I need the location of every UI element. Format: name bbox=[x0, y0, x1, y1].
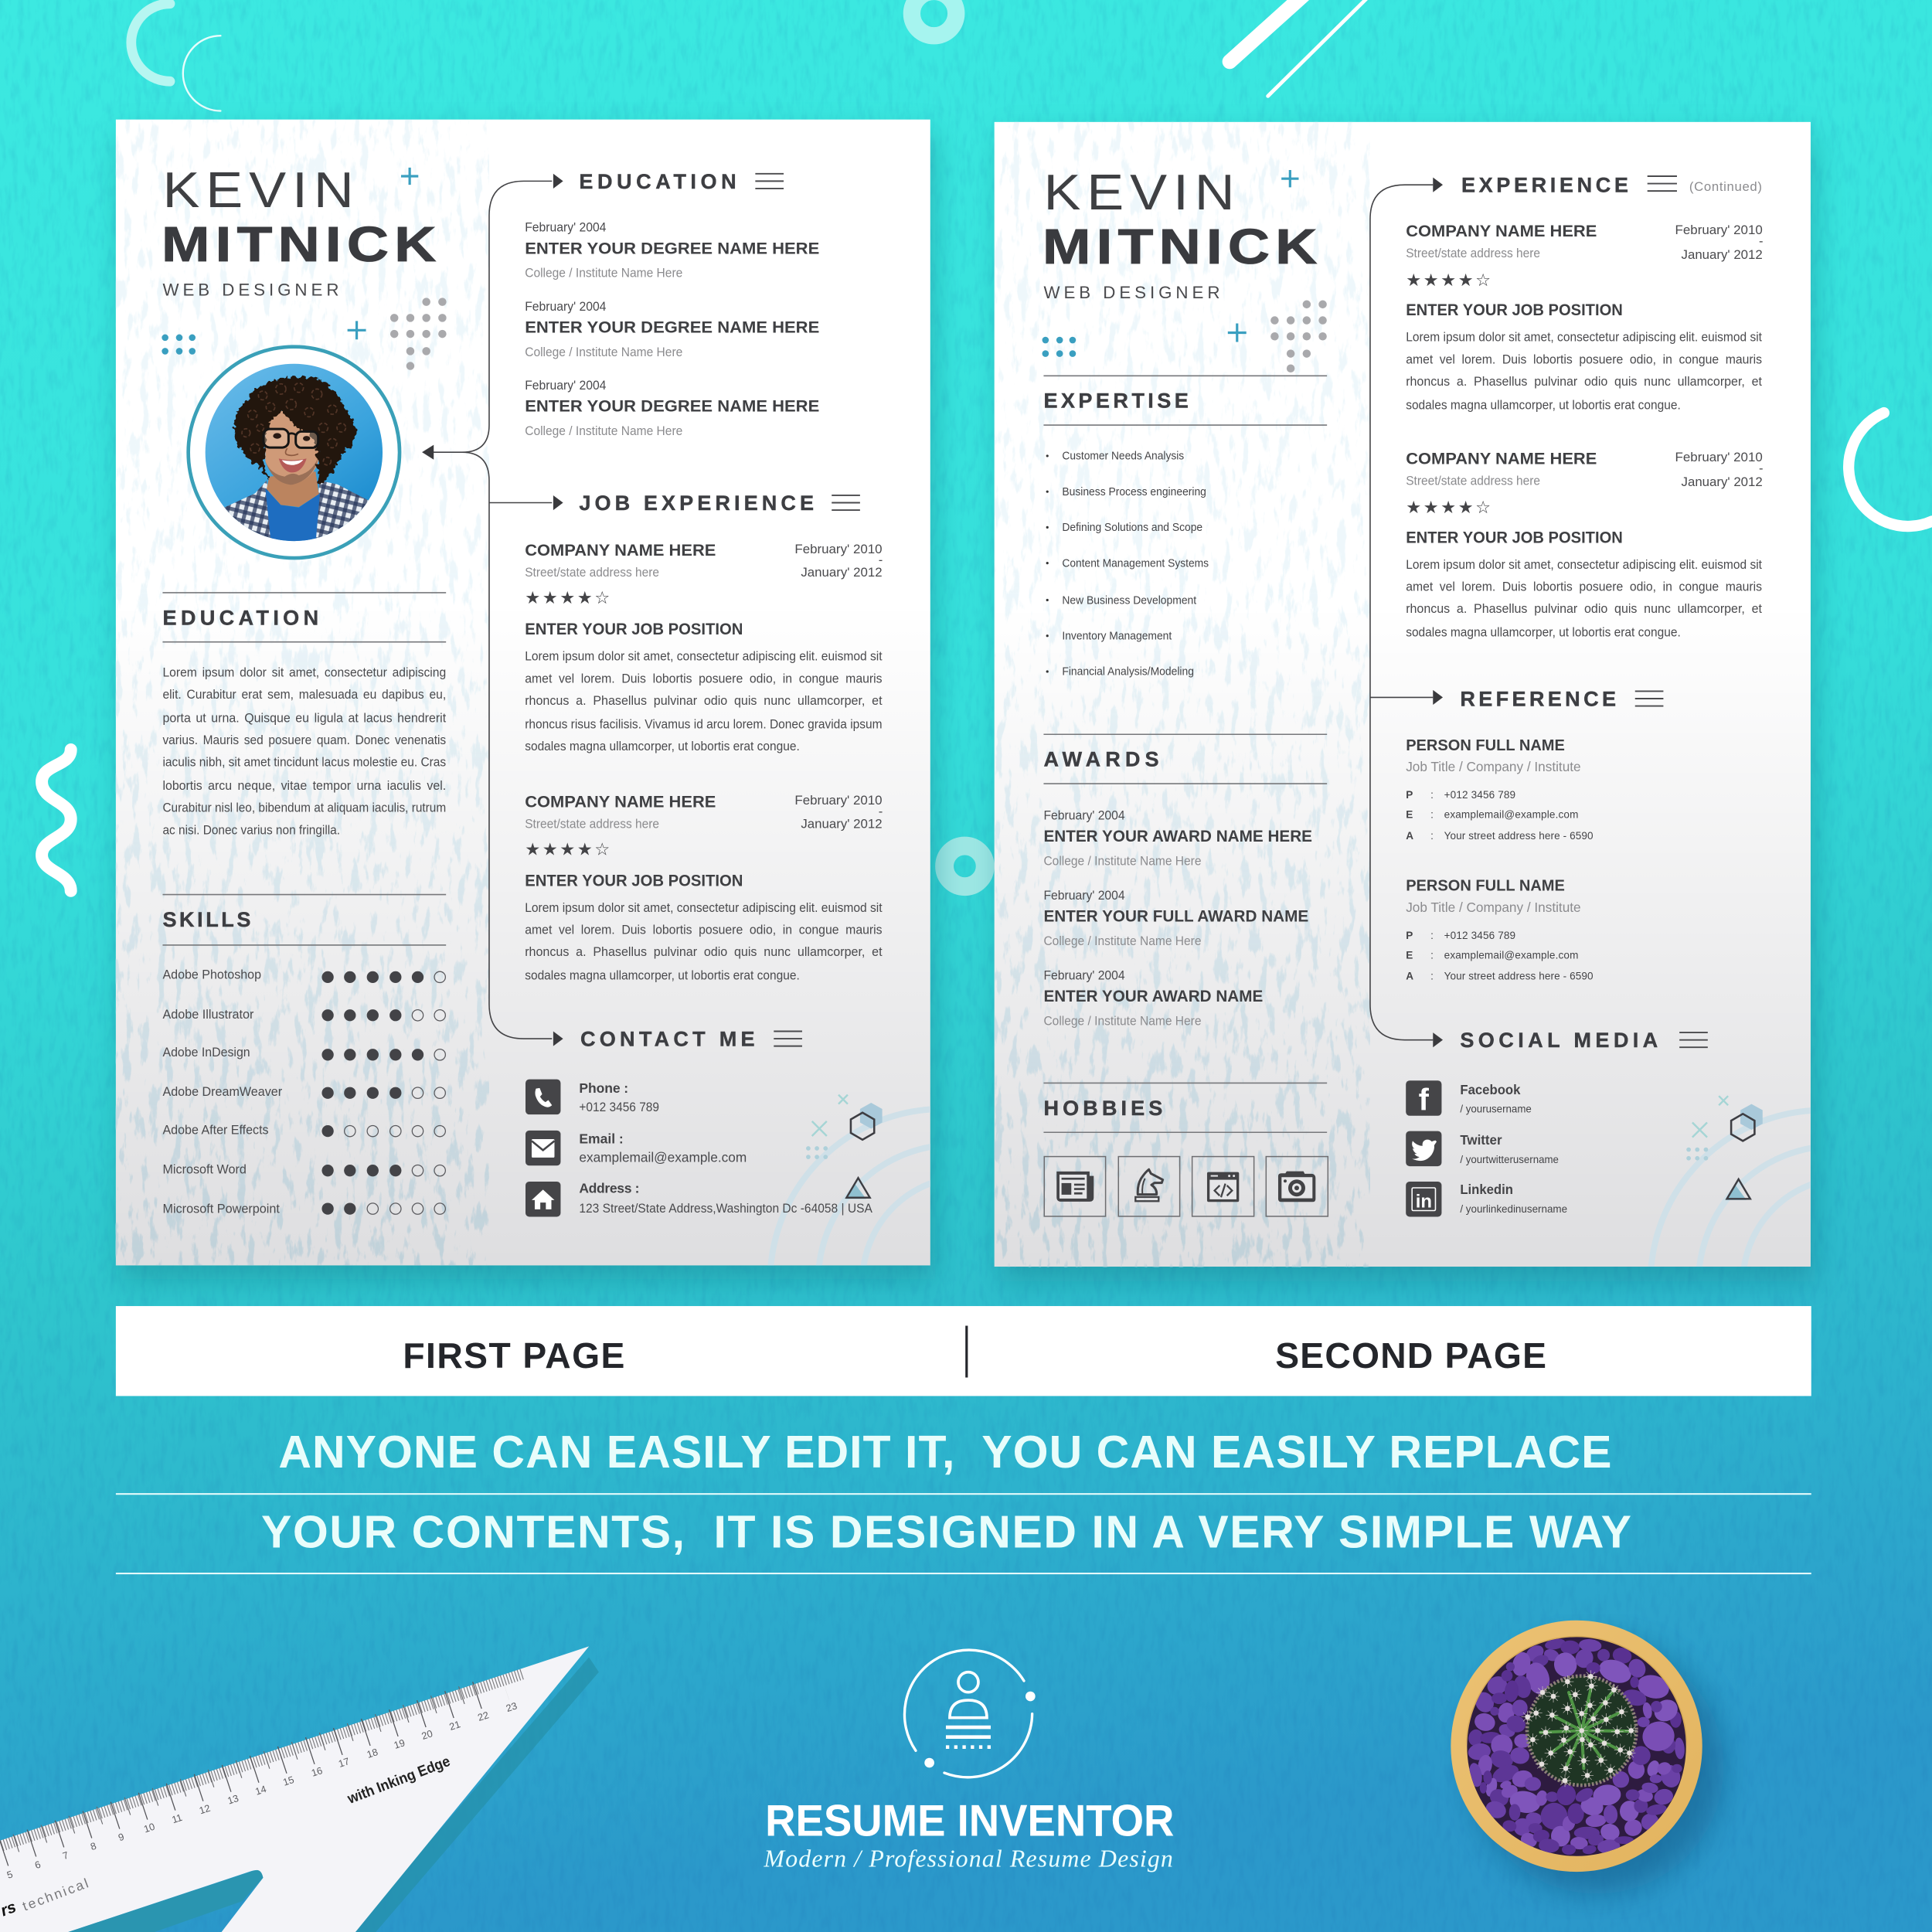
page shadows bbox=[121, 133, 1815, 1281]
ruler scale numbers: 20 bbox=[420, 1727, 434, 1742]
ruler scale numbers: 13 bbox=[226, 1792, 240, 1807]
reference person one: +012 3456 789 bbox=[1444, 789, 1515, 801]
job entry one: amet vel lorem. Duis lobortis posuere odio, in congue mauris bbox=[525, 671, 883, 685]
job entry four: ENTER YOUR JOB POSITION bbox=[1406, 528, 1623, 546]
skills rating list: Adobe DreamWeaver bbox=[162, 1084, 283, 1099]
job entry two: amet vel lorem. Duis lobortis posuere odio, in congue mauris bbox=[525, 923, 883, 937]
heading: job experience: JOB EXPERIENCE bbox=[579, 491, 814, 515]
job entry three: Street/state address here bbox=[1406, 246, 1540, 260]
job entry four: ★★★★☆ bbox=[1406, 498, 1491, 518]
reference person two: A bbox=[1406, 971, 1413, 982]
social media list: / yourusername bbox=[1460, 1104, 1532, 1115]
brand tagline: Modern / Professional Resume Design bbox=[764, 1845, 1173, 1872]
expertise list: Business Process engineering bbox=[1062, 486, 1206, 498]
job entry one: Lorem ipsum dolor sit amet, consectetur adipiscing elit. euismod sit bbox=[525, 649, 883, 664]
icon: linkedin bbox=[1406, 1182, 1441, 1216]
skills rating list: Adobe Illustrator bbox=[162, 1007, 254, 1022]
ruler scale numbers: 23 bbox=[505, 1699, 519, 1714]
icon: newspaper bbox=[1044, 1157, 1106, 1216]
ruler scale numbers: 5 bbox=[5, 1868, 14, 1881]
name heading: WEB DESIGNER bbox=[1043, 283, 1219, 302]
text block: education paragraph bbox=[162, 665, 447, 837]
expertise list: Defining Solutions and Scope bbox=[1062, 522, 1202, 534]
reference person two: : bbox=[1430, 949, 1434, 961]
icon: email bbox=[526, 1131, 560, 1165]
expertise list: Content Management Systems bbox=[1062, 557, 1209, 570]
job entry three bbox=[1406, 222, 1764, 412]
reference person two: PERSON FULL NAME bbox=[1406, 878, 1565, 895]
reference person one: : bbox=[1430, 830, 1434, 842]
text block: education paragraph: lobortis arcu neque, vitae tempor urna iaculis vel. bbox=[162, 778, 446, 793]
job entry four: - bbox=[1759, 461, 1764, 475]
education entries: ENTER YOUR DEGREE NAME HERE bbox=[525, 397, 819, 416]
job entry four: January' 2012 bbox=[1682, 474, 1763, 489]
decoration: left squiggle bbox=[42, 750, 71, 891]
education entries: February' 2004 bbox=[525, 378, 606, 393]
decoration: corner arcs and shapes bbox=[1648, 1096, 1810, 1267]
job entry one bbox=[525, 541, 883, 753]
text block: education paragraph: elit. Curabitur erat sem, malesuada eu dapibus eu, bbox=[162, 687, 446, 702]
heading: expertise: EXPERTISE bbox=[1043, 389, 1189, 413]
expertise list: Customer Needs Analysis bbox=[1062, 451, 1184, 463]
name heading: WEB DESIGNER bbox=[162, 281, 338, 300]
connector lines with arrows bbox=[422, 174, 563, 1046]
connector lines with arrows bbox=[1370, 178, 1443, 1047]
job entry three: ★★★★☆ bbox=[1406, 270, 1491, 291]
job entry four: Street/state address here bbox=[1406, 473, 1540, 488]
text block: education paragraph: ac nisi. Donec varius non fringilla. bbox=[162, 822, 340, 837]
plus marks and dot grids bbox=[162, 168, 447, 370]
job entry three: sodales magna ullamcorper, ut lobortis erat congue. bbox=[1406, 397, 1681, 412]
job entry two: January' 2012 bbox=[801, 816, 883, 831]
reference person two bbox=[1406, 878, 1594, 982]
expertise list bbox=[1046, 451, 1209, 679]
job entry three: amet vel lorem. Duis lobortis posuere odio, in congue mauris bbox=[1406, 352, 1762, 366]
ruler scale numbers: 9 bbox=[117, 1831, 125, 1843]
portrait photo bbox=[189, 347, 400, 558]
education entries bbox=[525, 220, 819, 438]
headline text: YOUR CONTENTS, IT IS DESIGNED IN A VERY SIMPLE WAY bbox=[261, 1507, 1631, 1558]
reference person two: P bbox=[1406, 930, 1413, 941]
reference person two: : bbox=[1430, 930, 1434, 941]
icon: chess knight bbox=[1118, 1157, 1180, 1216]
heading: experience continued: EXPERIENCE bbox=[1461, 173, 1628, 197]
name heading: KEVIN bbox=[1043, 164, 1235, 220]
panel: page label band bbox=[116, 1306, 1811, 1396]
job entry one: sodales magna ullamcorper, ut lobortis erat congue. bbox=[525, 739, 800, 753]
decoration: right arc bbox=[1849, 413, 1932, 526]
education entries: ENTER YOUR DEGREE NAME HERE bbox=[525, 318, 819, 336]
name heading: KEVIN bbox=[162, 162, 354, 218]
job entry three: February' 2010 bbox=[1675, 223, 1763, 237]
ruler scale numbers bbox=[5, 1699, 519, 1881]
name heading: MITNICK bbox=[1043, 219, 1317, 274]
headline text bbox=[116, 1427, 1811, 1573]
contact details: +012 3456 789 bbox=[579, 1100, 659, 1114]
education entries: College / Institute Name Here bbox=[525, 423, 682, 438]
reference person two: : bbox=[1430, 971, 1434, 982]
icon: facebook bbox=[1406, 1080, 1441, 1117]
reference person one: : bbox=[1430, 789, 1434, 801]
contact details bbox=[526, 1080, 873, 1216]
ruler scale numbers: 12 bbox=[198, 1802, 212, 1816]
decoration: top ring bbox=[912, 0, 956, 36]
social media list bbox=[1406, 1080, 1567, 1216]
decoration: top slashes bbox=[1230, 0, 1368, 96]
reference person one: : bbox=[1430, 809, 1434, 821]
heading: contact me: CONTACT ME bbox=[580, 1027, 755, 1051]
decoration: top-left arcs bbox=[131, 4, 220, 111]
reference person two: Job Title / Company / Institute bbox=[1406, 900, 1581, 915]
job entry two: - bbox=[879, 804, 883, 818]
job entry three: January' 2012 bbox=[1682, 247, 1763, 262]
label: first page: FIRST PAGE bbox=[403, 1335, 624, 1376]
name heading bbox=[1043, 164, 1317, 302]
heading: skills: SKILLS bbox=[162, 907, 250, 931]
social media list: / yourlinkedinusername bbox=[1460, 1203, 1567, 1215]
reference person two: Your street address here - 6590 bbox=[1444, 971, 1594, 982]
job entry two: February' 2010 bbox=[794, 793, 883, 808]
reference person two: E bbox=[1406, 949, 1413, 961]
education entries: February' 2004 bbox=[525, 299, 606, 314]
job entry one: January' 2012 bbox=[801, 565, 883, 580]
plus marks and dot grids bbox=[1043, 170, 1327, 372]
heading: education sidebar: EDUCATION bbox=[162, 605, 318, 629]
education entries: College / Institute Name Here bbox=[525, 345, 682, 359]
label: second page: SECOND PAGE bbox=[1275, 1335, 1546, 1376]
job entry four: COMPANY NAME HERE bbox=[1406, 449, 1597, 468]
heading: social media: SOCIAL MEDIA bbox=[1460, 1028, 1658, 1052]
heading: experience continued bbox=[1461, 173, 1762, 197]
headline text: ANYONE CAN EASILY EDIT IT, YOU CAN EASILY REPLACE bbox=[278, 1427, 1611, 1478]
icon: code window bbox=[1192, 1157, 1254, 1216]
text block: education paragraph: iaculis nibh, sit amet tincidunt lacus molestie eu. Cras bbox=[162, 755, 446, 770]
social media list: / yourtwitterusername bbox=[1460, 1154, 1559, 1165]
job entry three: rhoncus a. Phasellus pulvinar odio quis nunc ullamcorper, et bbox=[1406, 374, 1762, 389]
ruler bbox=[0, 1646, 599, 1932]
hobbies icons bbox=[1044, 1157, 1328, 1216]
cactus bbox=[1522, 1670, 1638, 1787]
awards entries: ENTER YOUR AWARD NAME bbox=[1043, 987, 1263, 1005]
awards entries bbox=[1043, 808, 1312, 1029]
heading: hobbies: HOBBIES bbox=[1043, 1096, 1162, 1120]
education entries: College / Institute Name Here bbox=[525, 266, 682, 281]
decoration: corner arcs and shapes bbox=[768, 1094, 930, 1266]
job entry four: rhoncus a. Phasellus pulvinar odio quis nunc ullamcorper, et bbox=[1406, 601, 1762, 616]
reference person one: E bbox=[1406, 809, 1413, 821]
awards entries: College / Institute Name Here bbox=[1043, 1014, 1202, 1029]
skills rating list: Adobe After Effects bbox=[162, 1123, 269, 1138]
panel: first resume page bbox=[116, 119, 930, 1266]
job entry four: sodales magna ullamcorper, ut lobortis erat congue. bbox=[1406, 625, 1681, 640]
awards entries: College / Institute Name Here bbox=[1043, 934, 1202, 948]
text block: education paragraph: porta ut urna. Quisque eu ligula at lacus hendrerit bbox=[162, 710, 447, 725]
job entry four: February' 2010 bbox=[1675, 450, 1763, 464]
skills rating list: Microsoft Word bbox=[162, 1162, 247, 1177]
ruler scale numbers: 8 bbox=[89, 1840, 97, 1852]
job entry one: - bbox=[879, 553, 883, 567]
job entry four bbox=[1406, 449, 1764, 640]
text block: education paragraph: varius. Mauris sed posuere quam. Donec venenatis bbox=[162, 733, 446, 747]
job entry one: Street/state address here bbox=[525, 565, 659, 580]
ruler scale numbers: 19 bbox=[393, 1736, 406, 1751]
heading: awards: AWARDS bbox=[1043, 747, 1159, 771]
ruler scale numbers: 11 bbox=[170, 1811, 184, 1825]
heading: experience continued: (Continued) bbox=[1689, 179, 1762, 194]
job entry three: - bbox=[1759, 233, 1764, 248]
job entry two: COMPANY NAME HERE bbox=[525, 792, 716, 811]
contact details: examplemail@example.com bbox=[579, 1150, 747, 1165]
education entries: February' 2004 bbox=[525, 220, 606, 235]
ruler scale numbers: 6 bbox=[33, 1859, 42, 1871]
reference person one: examplemail@example.com bbox=[1444, 809, 1578, 821]
job entry three: COMPANY NAME HERE bbox=[1406, 222, 1597, 240]
job entry two: ENTER YOUR JOB POSITION bbox=[525, 871, 743, 889]
job entry three: ENTER YOUR JOB POSITION bbox=[1406, 301, 1623, 319]
skills rating list: Microsoft Powerpoint bbox=[162, 1202, 280, 1216]
skills rating list bbox=[162, 968, 445, 1216]
job entry two: sodales magna ullamcorper, ut lobortis erat congue. bbox=[525, 968, 800, 983]
ruler: technical bbox=[20, 1876, 90, 1914]
job entry two bbox=[525, 792, 883, 983]
ruler scale numbers: 7 bbox=[61, 1849, 70, 1862]
job entry one: COMPANY NAME HERE bbox=[525, 541, 716, 560]
awards entries: ENTER YOUR AWARD NAME HERE bbox=[1043, 827, 1312, 845]
cactus pot bbox=[1451, 1621, 1724, 1894]
job entry four: Lorem ipsum dolor sit amet, consectetur adipiscing elit. euismod sit bbox=[1406, 557, 1762, 572]
icon: phone bbox=[526, 1080, 560, 1114]
social media list: Linkedin bbox=[1460, 1182, 1513, 1197]
ruler scale numbers: 14 bbox=[253, 1783, 267, 1798]
decoration: middle ring bbox=[944, 846, 985, 886]
reference person one: A bbox=[1406, 830, 1413, 842]
expertise list: Financial Analysis/Modeling bbox=[1062, 666, 1194, 679]
awards entries: College / Institute Name Here bbox=[1043, 853, 1202, 868]
heading: education: EDUCATION bbox=[579, 169, 736, 193]
brand name: RESUME INVENTOR bbox=[765, 1797, 1174, 1846]
contact details: 123 Street/State Address,Washington Dc -64058 | USA bbox=[579, 1201, 873, 1216]
ruler scale numbers: 16 bbox=[310, 1764, 324, 1779]
awards entries: February' 2004 bbox=[1043, 808, 1125, 822]
panel: second resume page bbox=[995, 122, 1932, 1455]
skills rating list: Adobe Photoshop bbox=[162, 968, 261, 982]
ruler scale numbers: 21 bbox=[447, 1718, 462, 1733]
icon: linkedin: in bbox=[1416, 1191, 1432, 1212]
icon: facebook: f bbox=[1419, 1083, 1430, 1117]
ruler scale numbers: 22 bbox=[476, 1709, 490, 1723]
logo emblem bbox=[904, 1650, 1036, 1777]
icon: twitter bbox=[1406, 1131, 1441, 1166]
skills rating list: Adobe InDesign bbox=[162, 1045, 250, 1060]
icon: address home bbox=[526, 1182, 560, 1216]
reference person one bbox=[1406, 737, 1594, 842]
awards entries: February' 2004 bbox=[1043, 888, 1125, 903]
social media list: Facebook bbox=[1460, 1082, 1521, 1097]
name heading bbox=[162, 162, 436, 300]
job entry four: amet vel lorem. Duis lobortis posuere odio, in congue mauris bbox=[1406, 580, 1762, 594]
education entries: ENTER YOUR DEGREE NAME HERE bbox=[525, 239, 819, 257]
contact details: Email : bbox=[579, 1131, 624, 1147]
ruler: with Inking Edge bbox=[345, 1753, 453, 1808]
social media list: Twitter bbox=[1460, 1132, 1502, 1148]
purple pebbles bbox=[1468, 1638, 1685, 1855]
text block: education paragraph: Lorem ipsum dolor sit amet, consectetur adipiscing bbox=[162, 665, 446, 679]
ruler scale numbers: 15 bbox=[281, 1774, 295, 1788]
reference person one: PERSON FULL NAME bbox=[1406, 737, 1565, 754]
job entry one: ★★★★☆ bbox=[525, 588, 610, 608]
ruler scale numbers: 18 bbox=[366, 1746, 379, 1760]
job entry one: ENTER YOUR JOB POSITION bbox=[525, 620, 743, 638]
awards entries: February' 2004 bbox=[1043, 968, 1125, 983]
job entry two: Street/state address here bbox=[525, 816, 659, 831]
ruler scale numbers: 17 bbox=[337, 1755, 351, 1770]
job entry two: ★★★★☆ bbox=[525, 840, 610, 860]
awards entries: ENTER YOUR FULL AWARD NAME bbox=[1043, 907, 1308, 926]
reference person one: P bbox=[1406, 789, 1413, 801]
contact details: Phone : bbox=[579, 1080, 628, 1096]
job entry two: Lorem ipsum dolor sit amet, consectetur adipiscing elit. euismod sit bbox=[525, 900, 883, 915]
text block: education paragraph: Curabitur nisl leo, bibendum at aliquam iaculis, rutrum bbox=[162, 801, 446, 815]
job entry two: rhoncus a. Phasellus pulvinar odio quis nunc ullamcorper, et bbox=[525, 944, 883, 959]
name heading: MITNICK bbox=[162, 216, 436, 272]
contact details: Address : bbox=[579, 1180, 639, 1196]
ruler scale numbers: 10 bbox=[142, 1821, 156, 1835]
heading: reference: REFERENCE bbox=[1460, 687, 1616, 711]
expertise list: Inventory Management bbox=[1062, 630, 1172, 642]
reference person two: examplemail@example.com bbox=[1444, 949, 1578, 961]
expertise list: New Business Development bbox=[1062, 594, 1196, 607]
job entry three: Lorem ipsum dolor sit amet, consectetur adipiscing elit. euismod sit bbox=[1406, 330, 1762, 345]
reference person one: Your street address here - 6590 bbox=[1444, 830, 1594, 842]
job entry one: rhoncus a. Phasellus pulvinar odio quis nunc ullamcorper, et bbox=[525, 693, 883, 708]
reference person one: Job Title / Company / Institute bbox=[1406, 759, 1581, 774]
job entry one: February' 2010 bbox=[794, 542, 883, 556]
job entry one: rhoncus risus facilisis. Vivamus id arcu lorem. Donec gravida ipsum bbox=[525, 716, 883, 731]
icon: camera bbox=[1266, 1157, 1328, 1216]
reference person two: +012 3456 789 bbox=[1444, 930, 1515, 941]
